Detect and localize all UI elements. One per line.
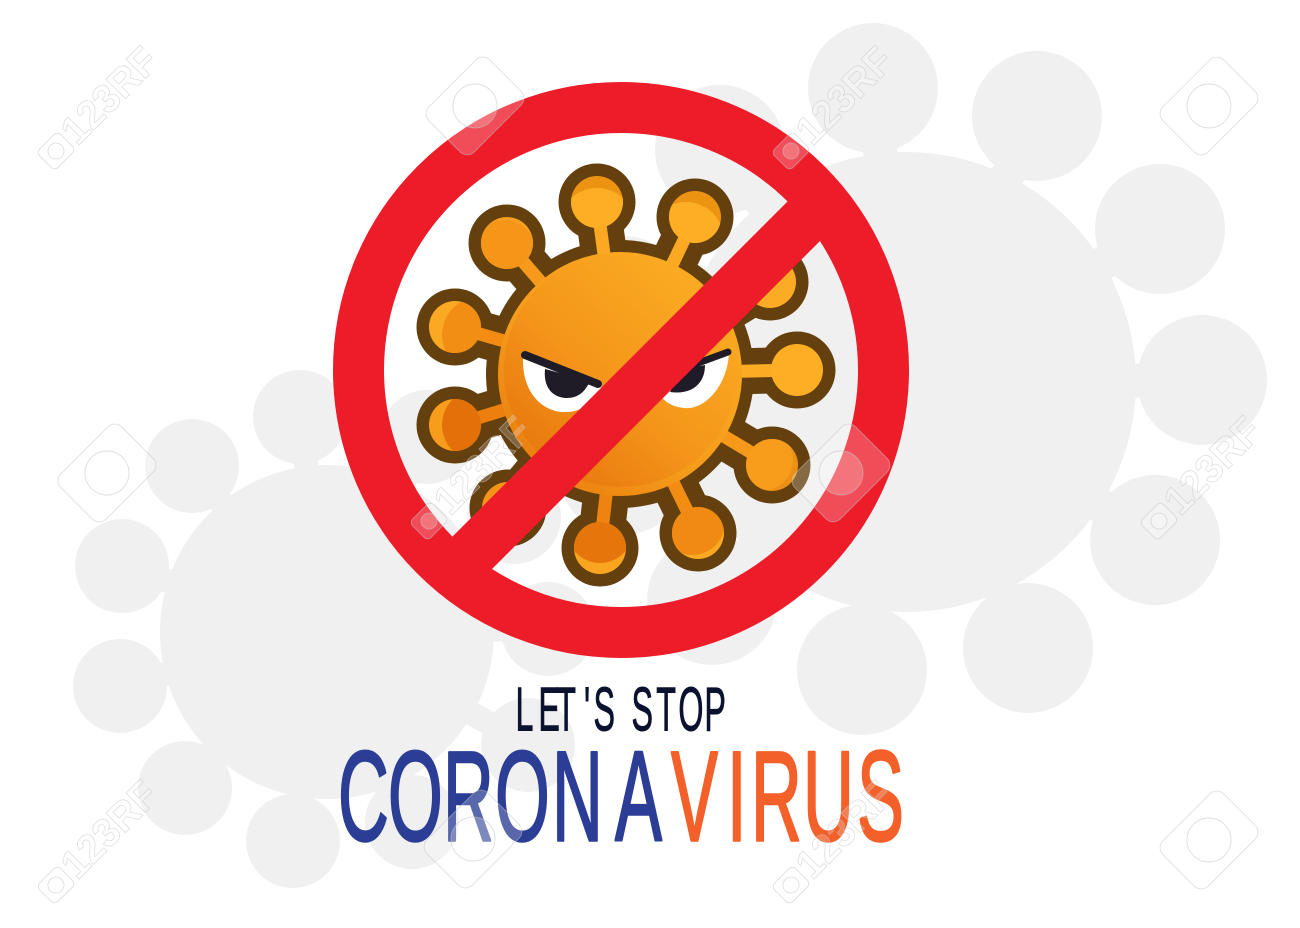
background virus silhouette: small left [73,370,595,888]
watermark: top center: 123RF [787,39,902,153]
red ring [358,108,884,632]
watermark: top left: 123RF [52,39,167,153]
watermark icon: top right [1156,53,1262,159]
left eye [523,355,602,412]
watermark icon: top [422,53,528,159]
watermark: middle center [402,409,540,547]
watermark icon: bottom right [1156,787,1262,893]
virus outline [416,164,836,586]
virus lobes with shaded crescents [429,176,823,574]
watermark: bottom left: 123RF [52,773,167,887]
watermark: bottom center [764,773,902,911]
watermark icon: middle left [54,420,160,526]
watermark: bottom center: 123RF [787,773,902,887]
background virus silhouette: large right [558,23,1267,735]
watermark: middle right [1132,409,1270,547]
watermark: top left [29,39,167,177]
watermark: bottom left [29,773,167,911]
virus stems fill [455,202,797,548]
word: virus: VIRUS [671,724,904,868]
watermark: middle center: 123RF [425,409,540,523]
heading: coronavirus [338,724,904,868]
red diagonal slash [420,169,850,601]
watermark: middle right: 123RF [1155,409,1270,523]
watermark icon: bottom [420,786,526,892]
watermark icon: middle [788,420,894,526]
watermark: top center [764,39,902,177]
prohibition sign [358,108,884,632]
word: corona: CORONA [338,724,662,868]
heading: let's stop: LET'S STOP [515,675,726,744]
right eye [660,352,729,408]
angry orange virus character [416,164,836,586]
virus body [498,252,742,496]
